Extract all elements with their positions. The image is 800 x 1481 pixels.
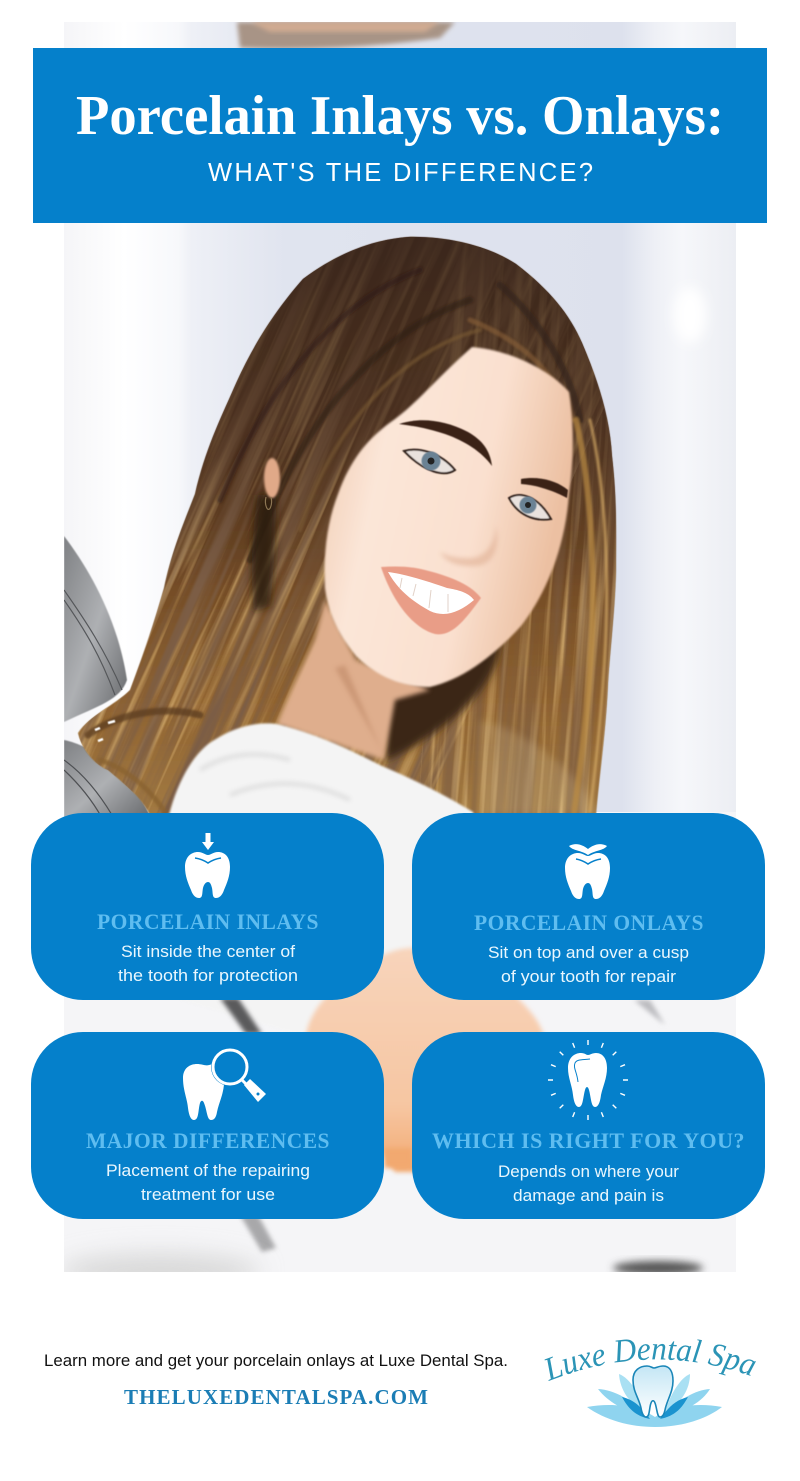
description bbox=[118, 942, 298, 985]
title: Porcelain Inlays vs. Onlays: bbox=[76, 85, 724, 147]
description bbox=[488, 943, 689, 986]
panel: porcelain onlays bbox=[412, 813, 765, 1000]
icon: tooth and magnifying glass bbox=[183, 1048, 266, 1120]
description: treatment for use bbox=[141, 1185, 275, 1204]
footer call to action: Learn more and get your porcelain onlays at Luxe Dental Spa. bbox=[44, 1351, 508, 1370]
panel: porcelain inlays bbox=[31, 813, 384, 1000]
panel: which is right for you bbox=[412, 1032, 765, 1219]
description: Depends on where your bbox=[498, 1162, 679, 1181]
icon: tooth with arrow down bbox=[185, 833, 230, 898]
icon: tooth with cap bbox=[565, 844, 610, 899]
description bbox=[498, 1162, 679, 1205]
description: Placement of the repairing bbox=[106, 1161, 310, 1180]
logo lotus and tooth bbox=[587, 1366, 722, 1427]
heading: WHICH IS RIGHT FOR YOU? bbox=[432, 1128, 745, 1153]
heading: PORCELAIN INLAYS bbox=[97, 909, 319, 934]
photo: smiling woman in dental chair bbox=[0, 22, 736, 1290]
description: the tooth for protection bbox=[118, 966, 298, 985]
description: Sit inside the center of bbox=[121, 942, 295, 961]
panel: major differences bbox=[31, 1032, 384, 1219]
description: Sit on top and over a cusp bbox=[488, 943, 689, 962]
subtitle: WHAT'S THE DIFFERENCE? bbox=[208, 159, 593, 187]
logo: Luxe Dental Spa bbox=[544, 1339, 756, 1427]
description: damage and pain is bbox=[513, 1186, 664, 1205]
blurred lower background bbox=[60, 948, 703, 1290]
heading: MAJOR DIFFERENCES bbox=[86, 1128, 330, 1153]
face bbox=[264, 347, 573, 687]
title banner bbox=[33, 48, 767, 223]
logo wordmark: Luxe Dental Spa bbox=[544, 1339, 756, 1381]
website url: THELUXEDENTALSPA.COM bbox=[124, 1385, 428, 1409]
description: of your tooth for repair bbox=[501, 967, 676, 986]
heading: PORCELAIN ONLAYS bbox=[474, 910, 704, 935]
hair bbox=[77, 236, 617, 813]
neck and shoulder bbox=[168, 600, 475, 816]
description bbox=[106, 1161, 310, 1204]
icon: shining tooth bbox=[548, 1040, 628, 1120]
